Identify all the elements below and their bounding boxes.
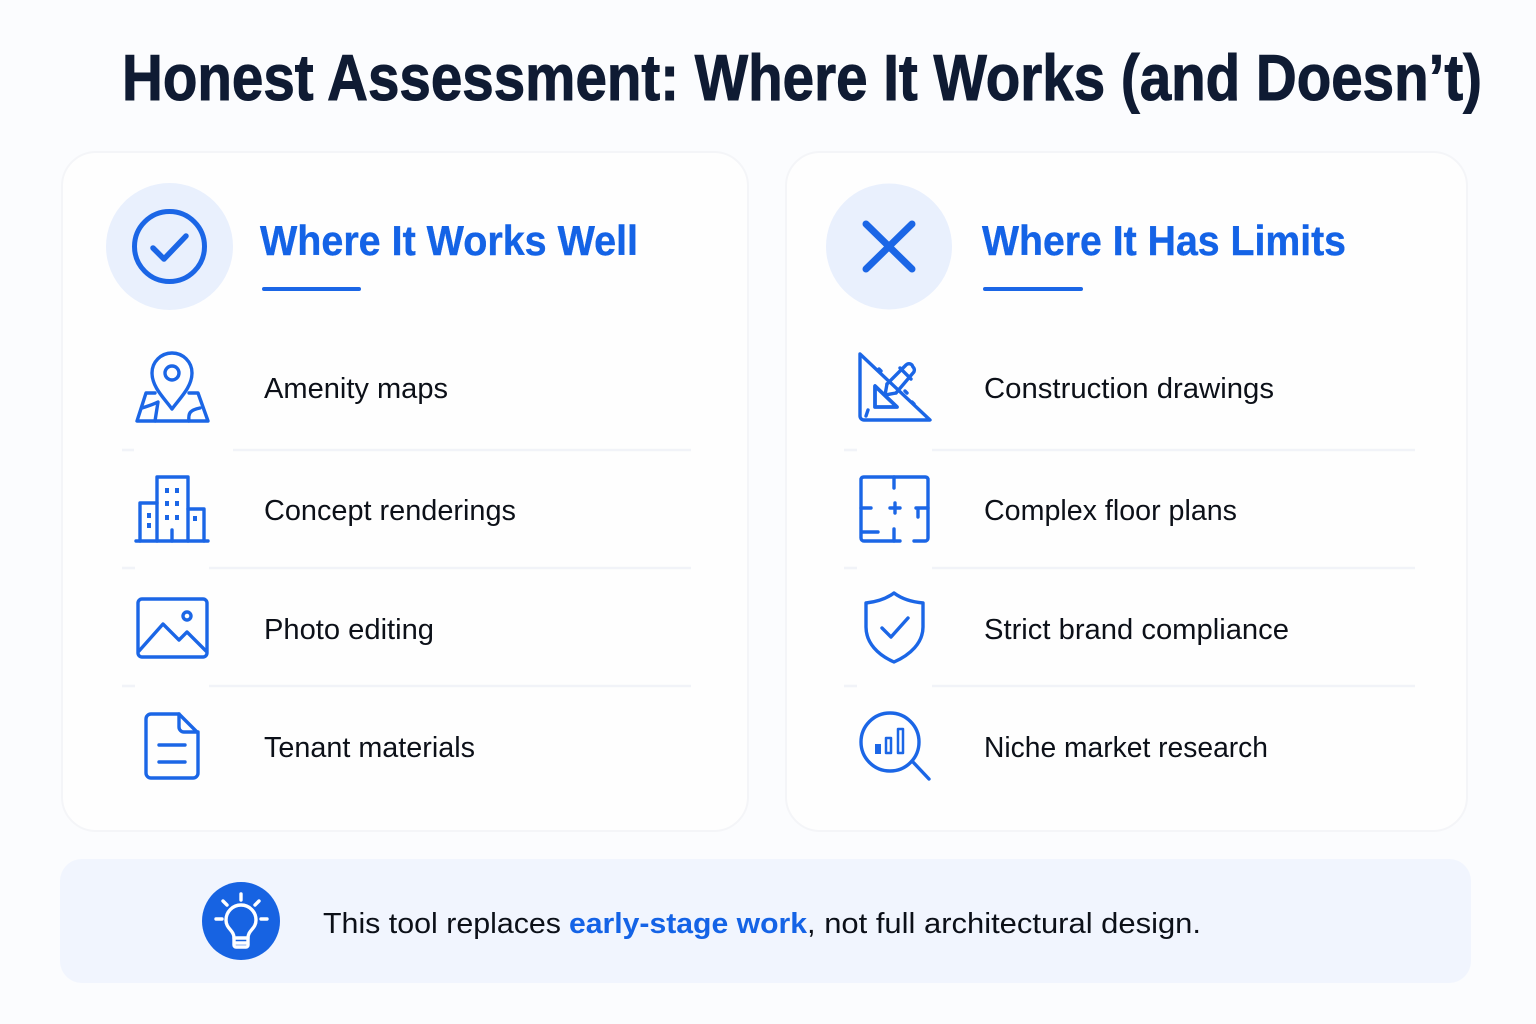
text: construction drawings: Construction drawings [984, 373, 1274, 405]
icon: image [138, 599, 207, 657]
text: niche market research: Niche market research [984, 732, 1268, 764]
icon: buildings [136, 477, 208, 541]
heading underline [262, 287, 361, 291]
heading: where it has limits: Where It Has Limits [982, 217, 1346, 264]
heading: where it works well: Where It Works Well [260, 217, 638, 264]
icon: light bulb [202, 882, 280, 960]
icon: x mark [826, 184, 952, 310]
icon: set square and pencil [860, 354, 930, 420]
icon: floor plan [861, 477, 928, 541]
callout text [323, 908, 1201, 940]
text: amenity maps: Amenity maps [264, 373, 448, 405]
callout text: early-stage work [569, 908, 808, 940]
panel: where it has limits [786, 152, 1467, 831]
icon: check circle [106, 183, 233, 310]
icon: map pin [137, 353, 208, 421]
callout banner [60, 859, 1471, 983]
callout text: , not full architectural design. [807, 908, 1201, 940]
text: complex floor plans: Complex floor plans [984, 495, 1237, 527]
text: strict brand compliance: Strict brand compliance [984, 614, 1289, 646]
icon: shield [866, 593, 923, 662]
icon: magnifier with bars [861, 713, 929, 779]
callout text: This tool replaces [323, 908, 561, 940]
heading underline [983, 287, 1083, 291]
text: tenant materials: Tenant materials [264, 732, 475, 764]
icon: document [146, 714, 198, 778]
text: concept renderings: Concept renderings [264, 495, 516, 527]
text: photo editing: Photo editing [264, 614, 434, 646]
panel: where it works well [62, 152, 748, 831]
